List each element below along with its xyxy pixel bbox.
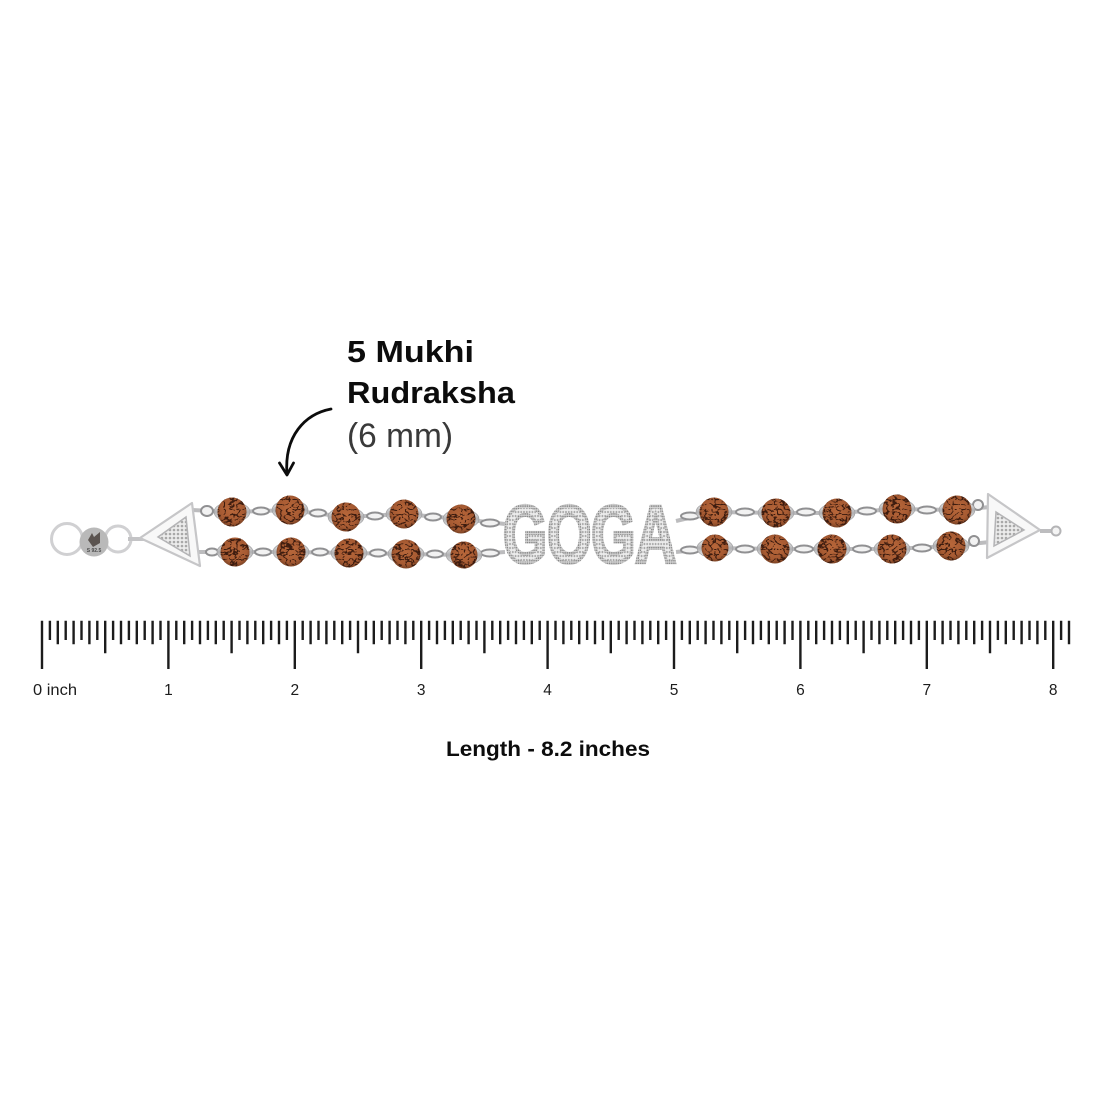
ruler labels: 7 xyxy=(922,682,931,699)
chain links xyxy=(192,500,990,558)
ruler labels: 5 xyxy=(670,682,678,699)
rudraksha beads xyxy=(218,494,972,568)
ruler labels: 0 inch xyxy=(33,682,77,699)
triangle outline xyxy=(140,503,200,566)
GOGA nameplate: GOGA xyxy=(503,489,676,579)
ruler labels: 2 xyxy=(290,682,299,699)
left triangle end cap xyxy=(140,503,200,566)
triangle inner xyxy=(158,517,190,556)
triangle outline xyxy=(987,494,1040,558)
ruler labels: 3 xyxy=(417,682,426,699)
length caption: Length - 8.2 inches xyxy=(446,738,650,761)
clasp ring right xyxy=(105,526,131,552)
bracelet xyxy=(52,489,1060,579)
end ball xyxy=(1052,526,1060,536)
callout: 5 Mukhi Rudraksha label xyxy=(347,334,516,455)
clasp connector xyxy=(128,537,144,541)
hallmark text: S 92.5 xyxy=(87,548,101,554)
ruler labels: 6 xyxy=(796,682,805,699)
ruler labels xyxy=(33,682,1058,699)
bead silver caps xyxy=(214,499,975,565)
ruler labels: 1 xyxy=(164,682,173,699)
left clasp xyxy=(52,524,144,556)
hallmark disc xyxy=(80,528,108,556)
end loop xyxy=(1040,529,1052,533)
right triangle end cap xyxy=(987,494,1060,558)
triangle inner xyxy=(994,512,1024,546)
ruler labels: 4 xyxy=(543,682,552,699)
arrow pointing to bead xyxy=(280,409,331,475)
hallmark mark xyxy=(88,532,100,547)
clasp ring left xyxy=(52,524,82,554)
ruler labels: 8 xyxy=(1049,682,1058,699)
ruler xyxy=(33,621,1069,699)
callout heading second line: Rudraksha xyxy=(347,375,516,410)
callout heading: 5 Mukhi xyxy=(347,334,474,369)
ruler ticks xyxy=(42,621,1069,669)
callout size: (6 mm) xyxy=(347,417,453,455)
